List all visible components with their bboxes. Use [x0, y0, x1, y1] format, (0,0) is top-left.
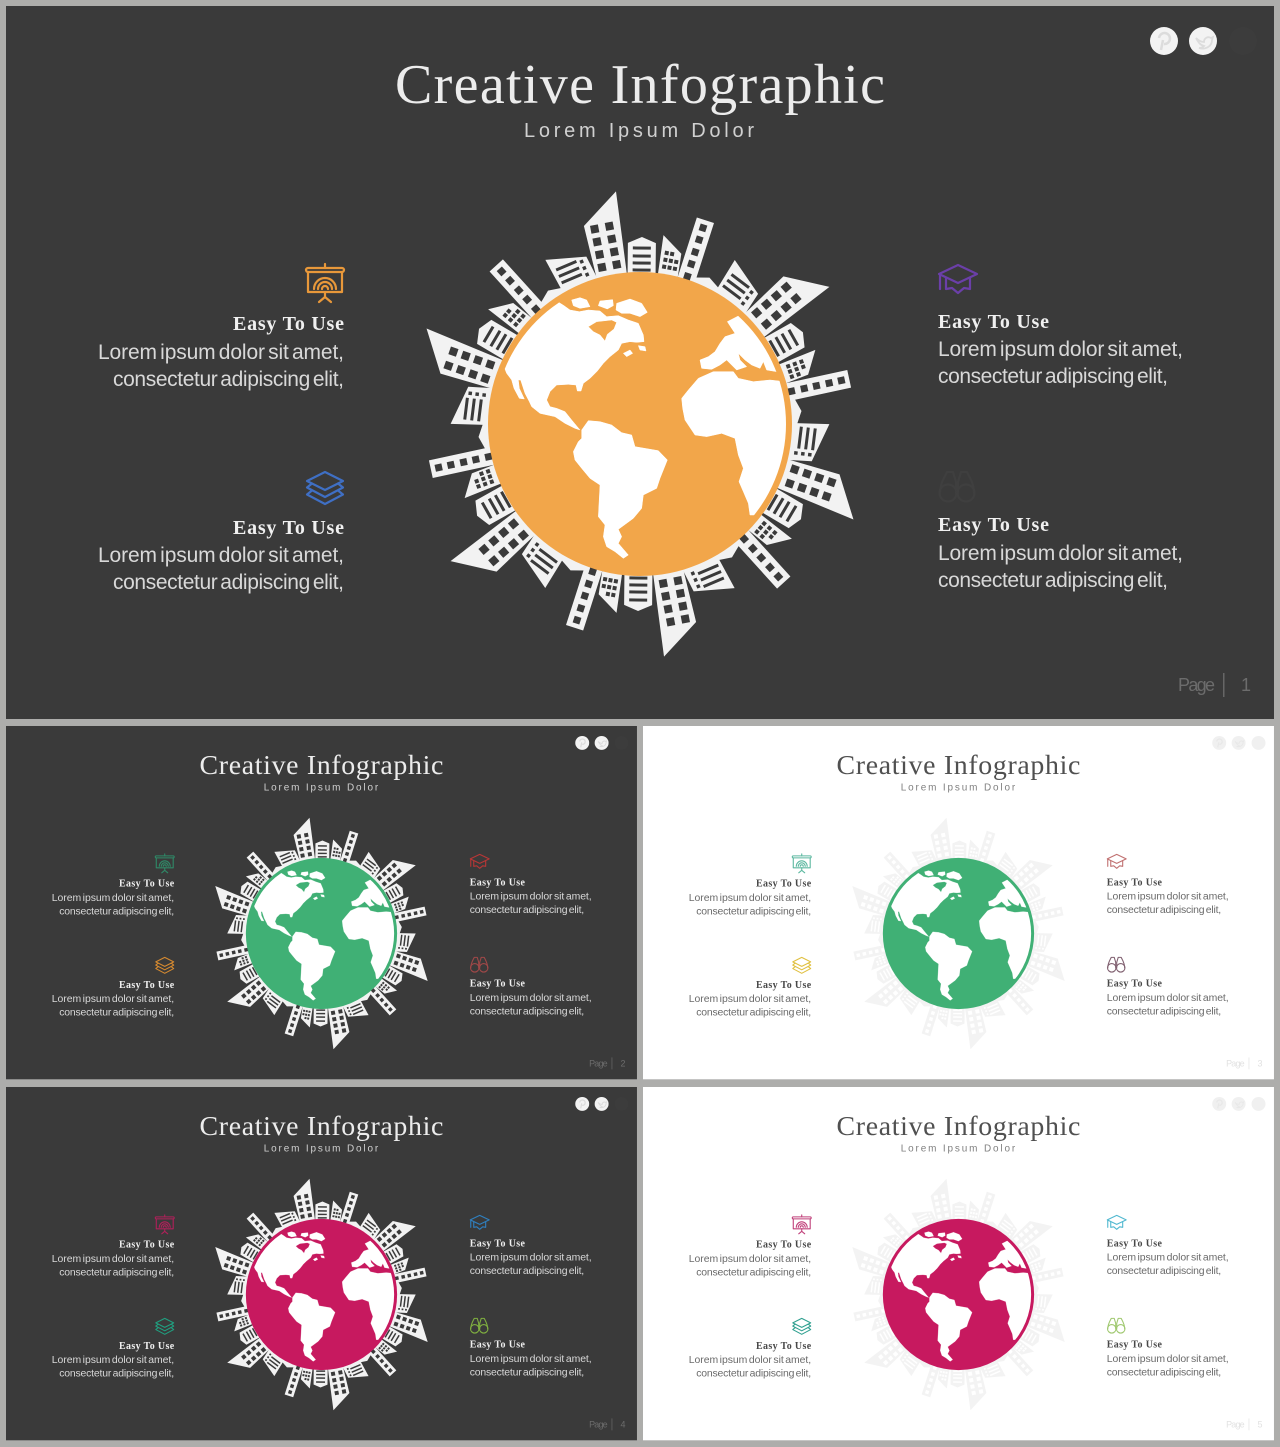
text block: top left: Lorem ipsum dolor sit amet, — [98, 341, 344, 364]
text block: top right: consectetur adipiscing elit, — [470, 905, 584, 916]
icon: binoculars — [1108, 957, 1125, 972]
panel: small dark slide, magenta globe — [6, 1087, 637, 1440]
page number — [589, 1057, 626, 1069]
text block: bottom left: consectetur adipiscing elit, — [113, 571, 344, 594]
icon: binoculars — [940, 472, 974, 502]
page number — [1226, 1418, 1263, 1430]
text block: bottom right: Lorem ipsum dolor sit amet, — [1107, 1354, 1229, 1365]
icon: layers — [793, 1318, 811, 1334]
text block: top right: Lorem ipsum dolor sit amet, — [1107, 1253, 1229, 1264]
page number — [589, 1418, 626, 1430]
page number: 2 — [621, 1058, 626, 1068]
social icons — [1212, 736, 1265, 750]
text block: bottom left: consectetur adipiscing elit, — [696, 1369, 811, 1380]
text block: top left: Easy To Use — [756, 879, 812, 890]
text block: bottom right: consectetur adipiscing elit, — [470, 1007, 584, 1018]
title: Creative Infographic — [837, 1111, 1080, 1142]
text block: bottom left: Easy To Use — [756, 1341, 812, 1352]
text block: top left: Lorem ipsum dolor sit amet, — [689, 1254, 811, 1265]
page number — [1226, 1057, 1263, 1069]
text block: bottom left: consectetur adipiscing elit, — [59, 1008, 174, 1019]
social icons — [1150, 27, 1257, 55]
text block: top right: Easy To Use — [938, 311, 1049, 333]
page number: 3 — [1258, 1058, 1263, 1068]
icon: graduation cap — [939, 265, 977, 293]
text block: top left — [689, 1240, 812, 1279]
icon: layers — [793, 957, 811, 973]
social icons — [575, 736, 628, 750]
page number: 4 — [621, 1419, 626, 1429]
text block: top right: consectetur adipiscing elit, — [1107, 1266, 1221, 1277]
text block: top right: Lorem ipsum dolor sit amet, — [470, 892, 592, 903]
icon: presentation board — [792, 854, 811, 873]
text block: top right — [1107, 878, 1229, 916]
icon: binoculars — [1108, 1318, 1125, 1333]
icon: binoculars — [471, 957, 488, 972]
text block: bottom right: Easy To Use — [1107, 979, 1163, 990]
text block: top left: consectetur adipiscing elit, — [113, 368, 344, 391]
icon: presentation board — [792, 1215, 811, 1234]
text block: bottom left: Easy To Use — [119, 1341, 175, 1352]
text block: top left: consectetur adipiscing elit, — [59, 1268, 174, 1279]
panel: small white slide, green globe — [643, 726, 1274, 1079]
icon: layers — [156, 1318, 174, 1334]
title: Creative Infographic — [200, 1111, 443, 1142]
text block: top left: Easy To Use — [119, 879, 175, 890]
text block: bottom right: Lorem ipsum dolor sit amet, — [470, 1354, 592, 1365]
page number: Page — [589, 1058, 608, 1068]
text block: top left: consectetur adipiscing elit, — [696, 1268, 811, 1279]
text block: bottom left: Easy To Use — [756, 980, 812, 991]
social icons — [1212, 1097, 1265, 1111]
text block: top left: Lorem ipsum dolor sit amet, — [689, 893, 811, 904]
text block: bottom right: Easy To Use — [1107, 1340, 1163, 1351]
text block: top right: Easy To Use — [1107, 1239, 1163, 1250]
text block: bottom right: consectetur adipiscing elit, — [470, 1368, 584, 1379]
icon: presentation board — [155, 1215, 174, 1234]
text block: bottom right — [1107, 979, 1229, 1018]
title: Creative Infographic — [200, 750, 443, 781]
icon: graduation cap — [470, 854, 489, 868]
text block: top left: Easy To Use — [233, 313, 344, 335]
subtitle: Lorem Ipsum Dolor — [524, 120, 754, 142]
text block: top left: consectetur adipiscing elit, — [696, 907, 811, 918]
text block: bottom right: consectetur adipiscing elit, — [1107, 1368, 1221, 1379]
text block: top right: Lorem ipsum dolor sit amet, — [470, 1253, 592, 1264]
illustration: globe with city skyline — [190, 1179, 453, 1410]
text block: bottom right: Lorem ipsum dolor sit amet, — [1107, 993, 1229, 1004]
text block: top left: Easy To Use — [756, 1240, 812, 1251]
text block: bottom right: consectetur adipiscing elit, — [1107, 1007, 1221, 1018]
text block: bottom right: consectetur adipiscing elit, — [938, 569, 1168, 592]
illustration: globe with city skyline — [190, 818, 453, 1049]
text block: top right — [1107, 1239, 1229, 1277]
subtitle: Lorem Ipsum Dolor — [901, 1144, 1016, 1155]
illustration: globe with city skyline — [375, 191, 905, 657]
text block: bottom right: Easy To Use — [470, 1340, 526, 1351]
text block: bottom right — [470, 979, 592, 1018]
icon: layers — [156, 957, 174, 973]
slide background — [643, 1087, 1274, 1440]
text block: bottom left — [689, 1341, 812, 1380]
text block: top right: consectetur adipiscing elit, — [1107, 905, 1221, 916]
text block: top right: Lorem ipsum dolor sit amet, — [938, 338, 1183, 361]
icon: presentation board — [155, 854, 174, 873]
icon: graduation cap — [470, 1215, 489, 1229]
text block: top left: Lorem ipsum dolor sit amet, — [52, 1254, 174, 1265]
text block: top left: Lorem ipsum dolor sit amet, — [52, 893, 174, 904]
text block: top right: consectetur adipiscing elit, — [470, 1266, 584, 1277]
icon: binoculars — [471, 1318, 488, 1333]
slide background — [643, 726, 1274, 1079]
text block: bottom left — [52, 1341, 175, 1380]
text block: top left: Easy To Use — [119, 1240, 175, 1251]
page number — [1178, 673, 1251, 697]
text block: top right — [470, 878, 592, 916]
subtitle: Lorem Ipsum Dolor — [264, 783, 379, 794]
text block: bottom left — [98, 517, 344, 594]
text block: top right: Lorem ipsum dolor sit amet, — [1107, 892, 1229, 903]
page number: Page — [589, 1419, 608, 1429]
text block: top left — [52, 1240, 175, 1279]
text block: bottom left: consectetur adipiscing elit, — [59, 1369, 174, 1380]
text block: bottom left: Lorem ipsum dolor sit amet, — [52, 1355, 174, 1366]
text block: bottom right: Lorem ipsum dolor sit amet, — [938, 542, 1183, 565]
title: Creative Infographic — [837, 750, 1080, 781]
text block: bottom left — [52, 980, 175, 1019]
text block: bottom left: Easy To Use — [233, 517, 344, 539]
text block: top left — [689, 879, 812, 918]
icon: presentation board — [306, 264, 344, 302]
illustration: globe with city skyline — [827, 1179, 1090, 1410]
page number: Page — [1178, 675, 1215, 695]
icon: graduation cap — [1107, 1215, 1126, 1229]
text block: bottom right: Easy To Use — [470, 979, 526, 990]
text block: bottom left — [689, 980, 812, 1019]
page number: 5 — [1258, 1419, 1263, 1429]
text block: bottom left: Lorem ipsum dolor sit amet, — [98, 544, 344, 567]
slide background — [6, 726, 637, 1079]
text block: bottom right — [470, 1340, 592, 1379]
slide background — [6, 6, 1274, 719]
text block: bottom left: Easy To Use — [119, 980, 175, 991]
page number: 1 — [1241, 675, 1251, 695]
illustration: globe with city skyline — [827, 818, 1090, 1049]
text block: bottom right — [1107, 1340, 1229, 1379]
text block: top left — [98, 313, 344, 391]
text block: bottom left: Lorem ipsum dolor sit amet, — [689, 994, 811, 1005]
slide background — [6, 1087, 637, 1440]
icon: graduation cap — [1107, 854, 1126, 868]
text block: top left: consectetur adipiscing elit, — [59, 907, 174, 918]
text block: top right: consectetur adipiscing elit, — [938, 365, 1168, 388]
text block: top right: Easy To Use — [470, 878, 526, 889]
panel: small white slide, magenta globe — [643, 1087, 1274, 1440]
text block: bottom right: Lorem ipsum dolor sit amet, — [470, 993, 592, 1004]
text block: bottom right — [938, 514, 1183, 592]
text block: top right — [470, 1239, 592, 1277]
page number: Page — [1226, 1058, 1245, 1068]
text block: bottom left: consectetur adipiscing elit, — [696, 1008, 811, 1019]
panel: main dark slide, orange globe — [6, 6, 1274, 719]
title: Creative Infographic — [395, 54, 885, 116]
subtitle: Lorem Ipsum Dolor — [264, 1144, 379, 1155]
text block: top right: Easy To Use — [470, 1239, 526, 1250]
text block: top left — [52, 879, 175, 918]
icon: layers — [307, 472, 343, 504]
text block: top right — [938, 311, 1183, 388]
text block: bottom right: Easy To Use — [938, 514, 1049, 536]
text block: top right: Easy To Use — [1107, 878, 1163, 889]
subtitle: Lorem Ipsum Dolor — [901, 783, 1016, 794]
text block: bottom left: Lorem ipsum dolor sit amet, — [52, 994, 174, 1005]
social icons — [575, 1097, 628, 1111]
text block: bottom left: Lorem ipsum dolor sit amet, — [689, 1355, 811, 1366]
page number: Page — [1226, 1419, 1245, 1429]
panel: small dark slide, green globe — [6, 726, 637, 1079]
